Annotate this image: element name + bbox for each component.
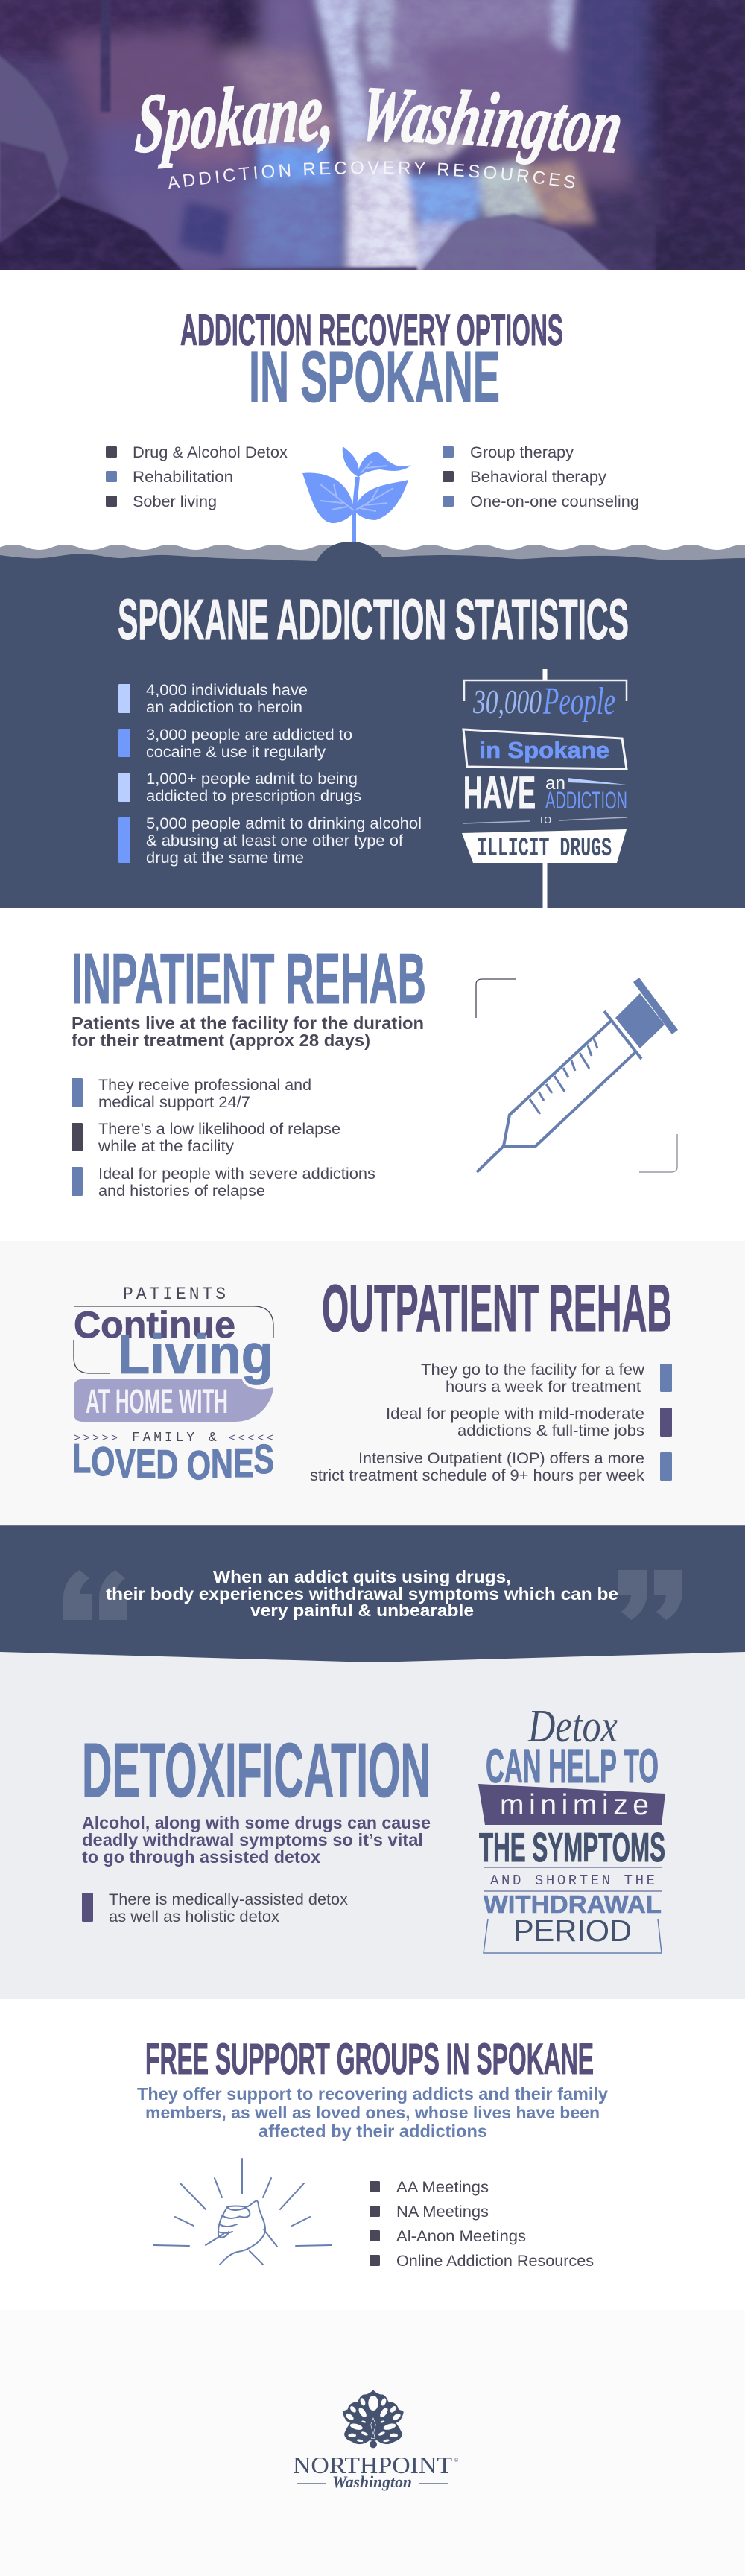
signpost: 30,000 people: ADDICTION [545,787,627,814]
list: right options: Behavioral therapy [470,469,607,486]
quote text: very painful & unbearable [250,1601,474,1620]
outpatient point: hours: hours a week for treatment [446,1379,641,1396]
typographic lockup: detox can help: minimize [500,1789,649,1821]
stat: alcohol: 5,000 people admit to drinking alcohol [146,815,422,832]
typographic lockup: detox can help: WITHDRAWAL [484,1890,662,1918]
support groups summary: members, as well as loved ones, whose lives have been [145,2103,600,2122]
heading: in spokane: IN SPOKANE [249,336,500,417]
inpatient summary: Patients live at the facility for the duration [72,1013,424,1033]
outpatient point: ideal for [386,1405,672,1440]
stat: prescription drugs: addicted to prescription drugs [146,788,361,805]
heading: inpatient rehab: INPATIENT REHAB [72,939,426,1019]
typographic lockup: detox can help [478,1701,665,1953]
stat: heroin: an addiction to heroin [146,699,302,716]
signpost: 30,000 people [462,669,627,908]
quote text: their body experiences withdrawal symptoms which can be [106,1584,618,1604]
panel: spokane addiction statistics [0,542,745,908]
list: left options: Drug & Alcohol Detox [133,444,288,461]
list: right options [443,444,639,510]
wave: light layer [0,545,745,574]
signpost: 30,000 people: 30,000 [472,683,542,721]
inpatient point: relapse [72,1121,340,1155]
typographic lockup: continue living: Continue [74,1304,235,1346]
inpatient point: ideal for: Ideal for people with severe addictions [98,1165,375,1183]
signpost: 30,000 people: TO [539,814,551,826]
stat: heroin: 4,000 individuals have [146,682,308,699]
inpatient point: relapse: There’s a low likelihood of relapse [98,1121,340,1138]
list: right options: One-on-one counseling [470,493,639,510]
outpatient point: intensive outpatient: Intensive Outpatient (IOP) offers a more [358,1450,644,1467]
panel: outpatient rehab [0,1241,745,1525]
stat: cocaine: 3,000 people are addicted to [146,727,352,744]
panel: withdrawal quote [0,1525,745,1662]
inpatient summary: for their treatment (approx 28 days) [72,1031,370,1050]
stat: prescription drugs [118,770,361,805]
outpatient background [0,1241,745,1525]
stat: cocaine [118,727,352,761]
typographic lockup: continue living: AT HOME WITH [86,1382,228,1420]
typographic lockup: detox can help: Detox [527,1701,618,1752]
list: support groups: NA Meetings [396,2203,489,2221]
stat: alcohol: drug at the same time [146,849,304,867]
signpost: 30,000 people: People [542,680,615,723]
typographic lockup: continue living: PATIENTS [123,1285,226,1304]
typographic lockup: continue living: & [209,1431,217,1446]
stat: alcohol: & abusing at least one other type of [146,832,403,849]
hero title [134,86,620,169]
support groups summary: They offer support to recovering addicts and their family [137,2084,608,2104]
quote text: When an addict quits using drugs, [213,1567,511,1586]
typographic lockup: continue living: LOVED ONES [72,1435,274,1488]
typographic lockup: detox can help: AND SHORTEN THE [490,1873,655,1889]
inpatient point: ideal for: and histories of relapse [98,1183,265,1200]
hero photo: waterfall and rocks [0,0,745,283]
outpatient point: ideal for: Ideal for people with mild-moderate [386,1405,644,1423]
list: support groups: Al-Anon Meetings [396,2228,526,2245]
signpost: 30,000 people: in Spokane [479,737,609,763]
typographic lockup: continue living: >>>>> [74,1432,118,1445]
typographic lockup: continue living: FAMILY [132,1431,194,1446]
stat: alcohol [118,815,422,867]
typographic lockup: continue living: <<<<< [229,1432,273,1445]
list: support groups [370,2179,594,2270]
detox point: as well as holistic detox [109,1908,280,1925]
signpost: 30,000 people: an [545,773,565,794]
list: right options: Group therapy [470,444,574,461]
footer background [0,2310,745,2576]
quote text [106,1567,618,1620]
panel: free support groups [137,2035,608,2270]
quote background [0,1525,745,1662]
logo: side rules [297,2483,448,2484]
typographic lockup: continue living [72,1285,274,1488]
heading: detoxification: DETOXIFICATION [82,1727,431,1813]
icon: closing quote mark [618,1570,682,1620]
hero banner [0,0,745,270]
icon: syringe [476,979,677,1172]
hero subtitle: ADDICTION RECOVERY RESOURCES [168,161,575,189]
detox summary: deadly withdrawal symptoms so it’s vital [82,1830,423,1849]
list: left options: Rehabilitation [133,469,233,486]
hero title: Spokane, [133,64,338,171]
panel: addiction recovery options [106,306,639,544]
detox background [0,1639,745,1999]
logo: registered mark: ® [454,2458,459,2463]
support groups summary [137,2084,608,2141]
logo: northpoint emblem [343,2390,404,2448]
icon: clasped hands with rays [153,2159,332,2265]
detox point [82,1891,349,1925]
panel: inpatient rehab [72,939,677,1200]
list: support groups: Online Addiction Resources [396,2253,594,2270]
inpatient point: support: They receive professional and [98,1077,311,1094]
list: support groups: AA Meetings [396,2179,489,2196]
panel: detoxification [0,1639,745,1999]
outpatient point: hours [421,1361,672,1396]
detox summary: to go through assisted detox [82,1847,320,1867]
inpatient summary [72,1013,424,1050]
detox summary: Alcohol, along with some drugs can cause [82,1813,431,1832]
signpost: 30,000 people: ILLICIT DRUGS [477,834,612,864]
list: left options: Sober living [133,493,217,510]
detox summary [82,1813,431,1867]
typographic lockup: detox can help: PERIOD [513,1914,632,1948]
inpatient point: support [72,1077,311,1111]
detox point: There is medically-assisted detox [109,1891,349,1908]
stat: prescription drugs: 1,000+ people admit to being [146,770,358,788]
list: left options [106,444,288,510]
logo: northpoint wordmark: NORTHPOINT [293,2452,452,2478]
stat: heroin [118,682,308,716]
panel: footer [0,2310,745,2576]
outpatient point: ideal for: addictions & full-time jobs [457,1423,644,1440]
logo: washington script: Washington [332,2472,412,2491]
typographic lockup: continue living: Living [118,1323,273,1385]
icon: soil mound [317,542,386,561]
hero title: Washington [353,70,630,169]
icon: opening quote mark [63,1570,127,1620]
inpatient point: relapse: while at the facility [98,1138,235,1155]
support groups summary: affected by their addictions [259,2121,487,2141]
stat: cocaine: cocaine & use it regularly [146,744,326,761]
inpatient point: ideal for [72,1165,375,1200]
inpatient point: support: medical support 24/7 [98,1094,250,1111]
dark section background with wave edge [0,554,745,908]
icon: plant sprout [302,446,411,544]
signpost: 30,000 people: HAVE [463,768,536,818]
outpatient point: intensive outpatient [310,1450,672,1484]
outpatient point: intensive outpatient: strict treatment schedule of 9+ hours per week [310,1467,645,1484]
outpatient point: hours: They go to the facility for a few [421,1361,645,1379]
